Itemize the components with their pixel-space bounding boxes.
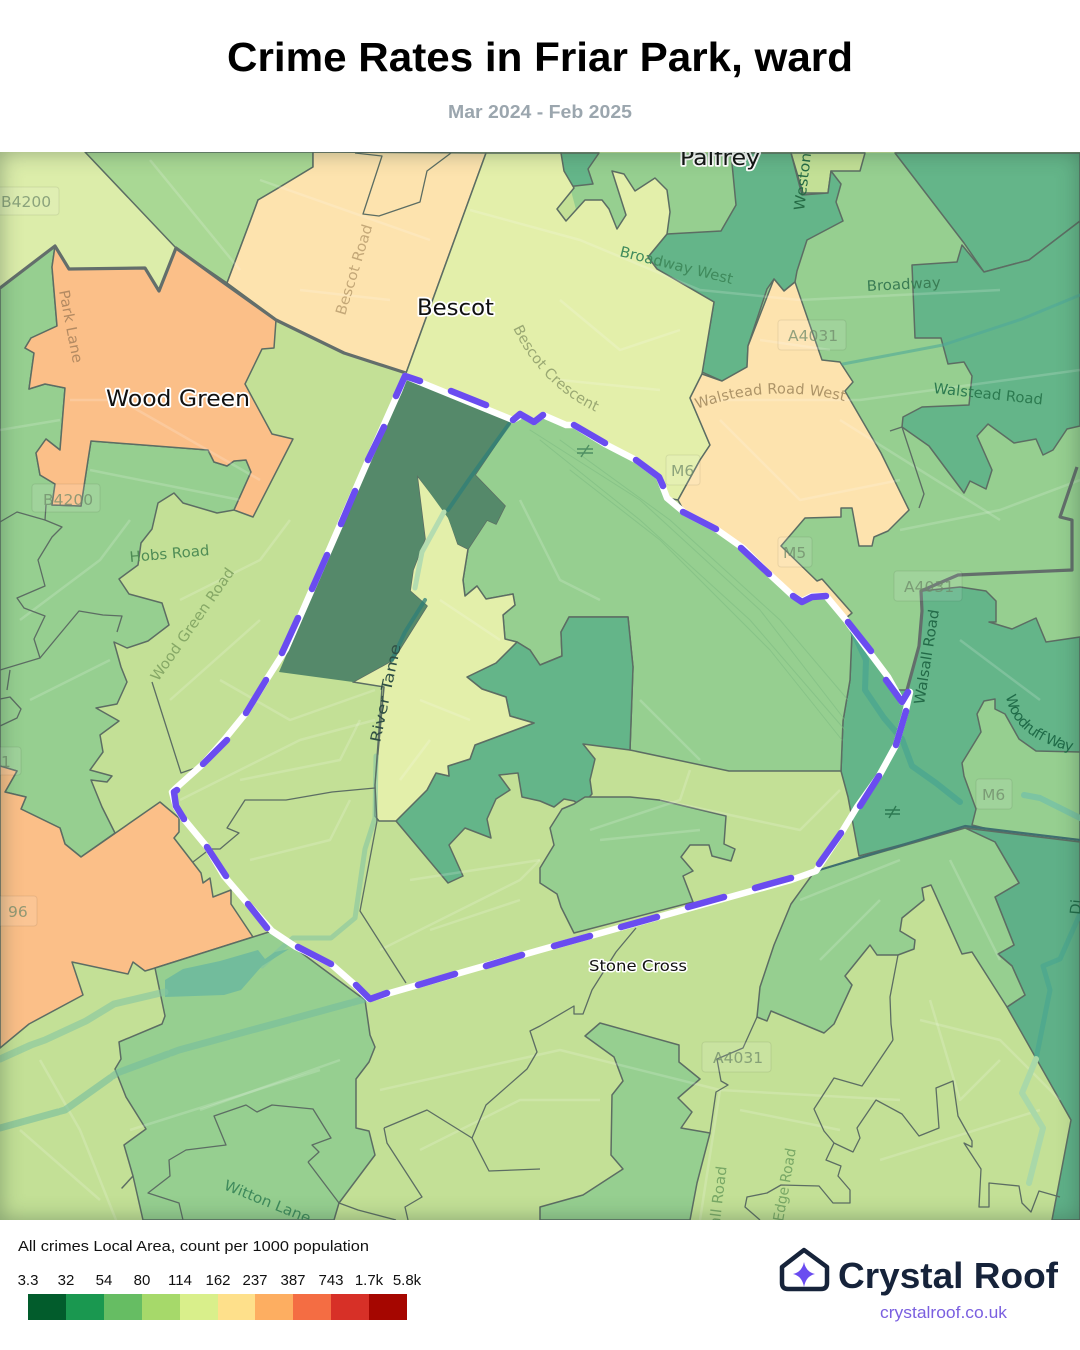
area: north-east mid green [561, 153, 1080, 690]
area: south central mid green [540, 1023, 710, 1220]
area: south-west orange [0, 766, 253, 1048]
area: ward mid green lower patch [540, 797, 735, 933]
road labels: Edge Road [771, 1147, 800, 1223]
area: north mid green [85, 152, 313, 283]
label: Wood Green: Wood Green [106, 387, 250, 412]
road network [0, 160, 1080, 1230]
motorway and road shields: B4200 [43, 491, 93, 509]
area: Wood Green orange [25, 246, 293, 517]
road labels: Walsall Road [703, 1165, 731, 1262]
road labels: Hobs Road [129, 543, 210, 566]
road labels: Weston [792, 152, 815, 211]
motorway and road shields: M6 [982, 786, 1005, 804]
road labels: Witton Lane [222, 1178, 313, 1227]
railway yard lines [530, 430, 848, 740]
area: north-east darker green [895, 153, 1080, 272]
area: Walstead tan [678, 279, 909, 618]
area: Walstead Road darker green [902, 221, 1080, 493]
legend scale labels: 1.7k [355, 1272, 384, 1289]
subtitle: date range: Mar 2024 - Feb 2025 [448, 101, 632, 122]
legend scale labels: 114 [168, 1272, 192, 1289]
legend scale labels: 54 [96, 1272, 112, 1289]
motorway and road shields: B4200 [1, 193, 51, 211]
water: far east river pale [1022, 1059, 1043, 1183]
map base: light green areas [0, 152, 1080, 1220]
title: Crime Rates in Friar Park, ward [227, 34, 853, 80]
motorway and road shields: M6 [671, 462, 694, 480]
road labels: River Tame [368, 643, 405, 744]
road labels: Broadway West [618, 244, 735, 288]
water: dark ward strips [392, 424, 509, 660]
motorway and road shields: A4031 [788, 327, 838, 345]
water: south-west river [0, 992, 165, 1059]
motorway and road shields [0, 187, 1012, 1072]
legend scale labels: 5.8k [393, 1272, 422, 1289]
road labels: Walstead Road [933, 381, 1044, 408]
motorway and road shields: A4031 [713, 1049, 763, 1067]
thick grey borough line [0, 246, 1077, 690]
icon: railway station east [885, 806, 900, 818]
legend scale labels: 237 [242, 1272, 268, 1289]
logo url: crystalroof.co.uk [880, 1304, 1008, 1322]
water: River Tame [262, 756, 376, 966]
area: Bescot east pale yellow [405, 153, 714, 500]
area: Bescot tan [227, 152, 486, 373]
legend [18, 1238, 422, 1320]
road labels [59, 154, 1080, 1220]
area: north-west pale [0, 152, 176, 291]
water: pale river strip [415, 512, 444, 588]
logo: Crystal Roof [782, 1250, 1059, 1322]
area: Woodruff mid green [962, 699, 1080, 842]
rail line [816, 826, 1080, 871]
water: east river [853, 632, 960, 802]
road labels: Wood Green Road [148, 565, 238, 684]
water: far east river [1036, 914, 1080, 1059]
area boundary lines [0, 153, 1060, 1220]
road labels: Walstead Road West [694, 383, 846, 408]
logo wordmark: Crystal Roof [838, 1255, 1059, 1296]
area: ward darkest green [279, 378, 511, 682]
area: ward green central patch [396, 617, 633, 883]
road labels: Walsall Road [912, 608, 943, 706]
road labels: Broadway [866, 275, 942, 295]
water: Walsall canal [843, 295, 1080, 364]
label: Stone Cross: Stone Cross [589, 957, 687, 975]
water and transport lines [0, 295, 1080, 1183]
motorway and road shields: A4031 [904, 578, 954, 596]
road labels: Bescot Road [334, 223, 376, 317]
area: ward pale yellow [353, 475, 534, 821]
road labels: Park Lane [55, 289, 85, 364]
water: south-west blob [165, 949, 289, 997]
icon: house with star [782, 1250, 827, 1289]
area: south-east mid green [757, 828, 1025, 1033]
area: far east green [965, 828, 1080, 1220]
label: Bescot: Bescot [417, 296, 494, 321]
water: east pale strip [1024, 795, 1080, 818]
legend scale labels: 80 [134, 1272, 150, 1289]
motorway and road shields: 1 [1, 753, 11, 771]
area: west mid green [0, 246, 251, 857]
legend scale labels: 162 [205, 1272, 231, 1289]
place labels [106, 146, 760, 975]
road labels: Bescot Crescent [514, 324, 599, 412]
ward boundary: Friar Park [172, 376, 910, 999]
area: Palfrey dark green [648, 153, 843, 381]
legend scale labels: 743 [318, 1272, 344, 1289]
icon: railway station [577, 445, 593, 457]
motorway and road shields: 96 [8, 903, 28, 921]
area: north small dark patch [559, 153, 599, 187]
map edge shadow [0, 152, 1080, 1220]
motorway and road shields: M5 [783, 544, 806, 562]
area: Weston pale patch [791, 153, 865, 193]
legend scale labels [18, 1272, 422, 1289]
legend scale labels: 32 [58, 1272, 74, 1289]
area: east green [841, 587, 1080, 856]
road labels: Woodruff Way [1006, 694, 1074, 753]
legend scale labels: 3.3 [18, 1272, 38, 1289]
legend title: All crimes Local Area, count per 1000 population [18, 1238, 369, 1255]
label: Palfrey: Palfrey [680, 146, 760, 171]
legend scale labels: 387 [280, 1272, 306, 1289]
road: south-west motorway strip [0, 999, 365, 1128]
legend colour ramp [28, 1294, 407, 1320]
area: south-west mid green [115, 931, 375, 1220]
area: ward mid green large [463, 415, 852, 771]
